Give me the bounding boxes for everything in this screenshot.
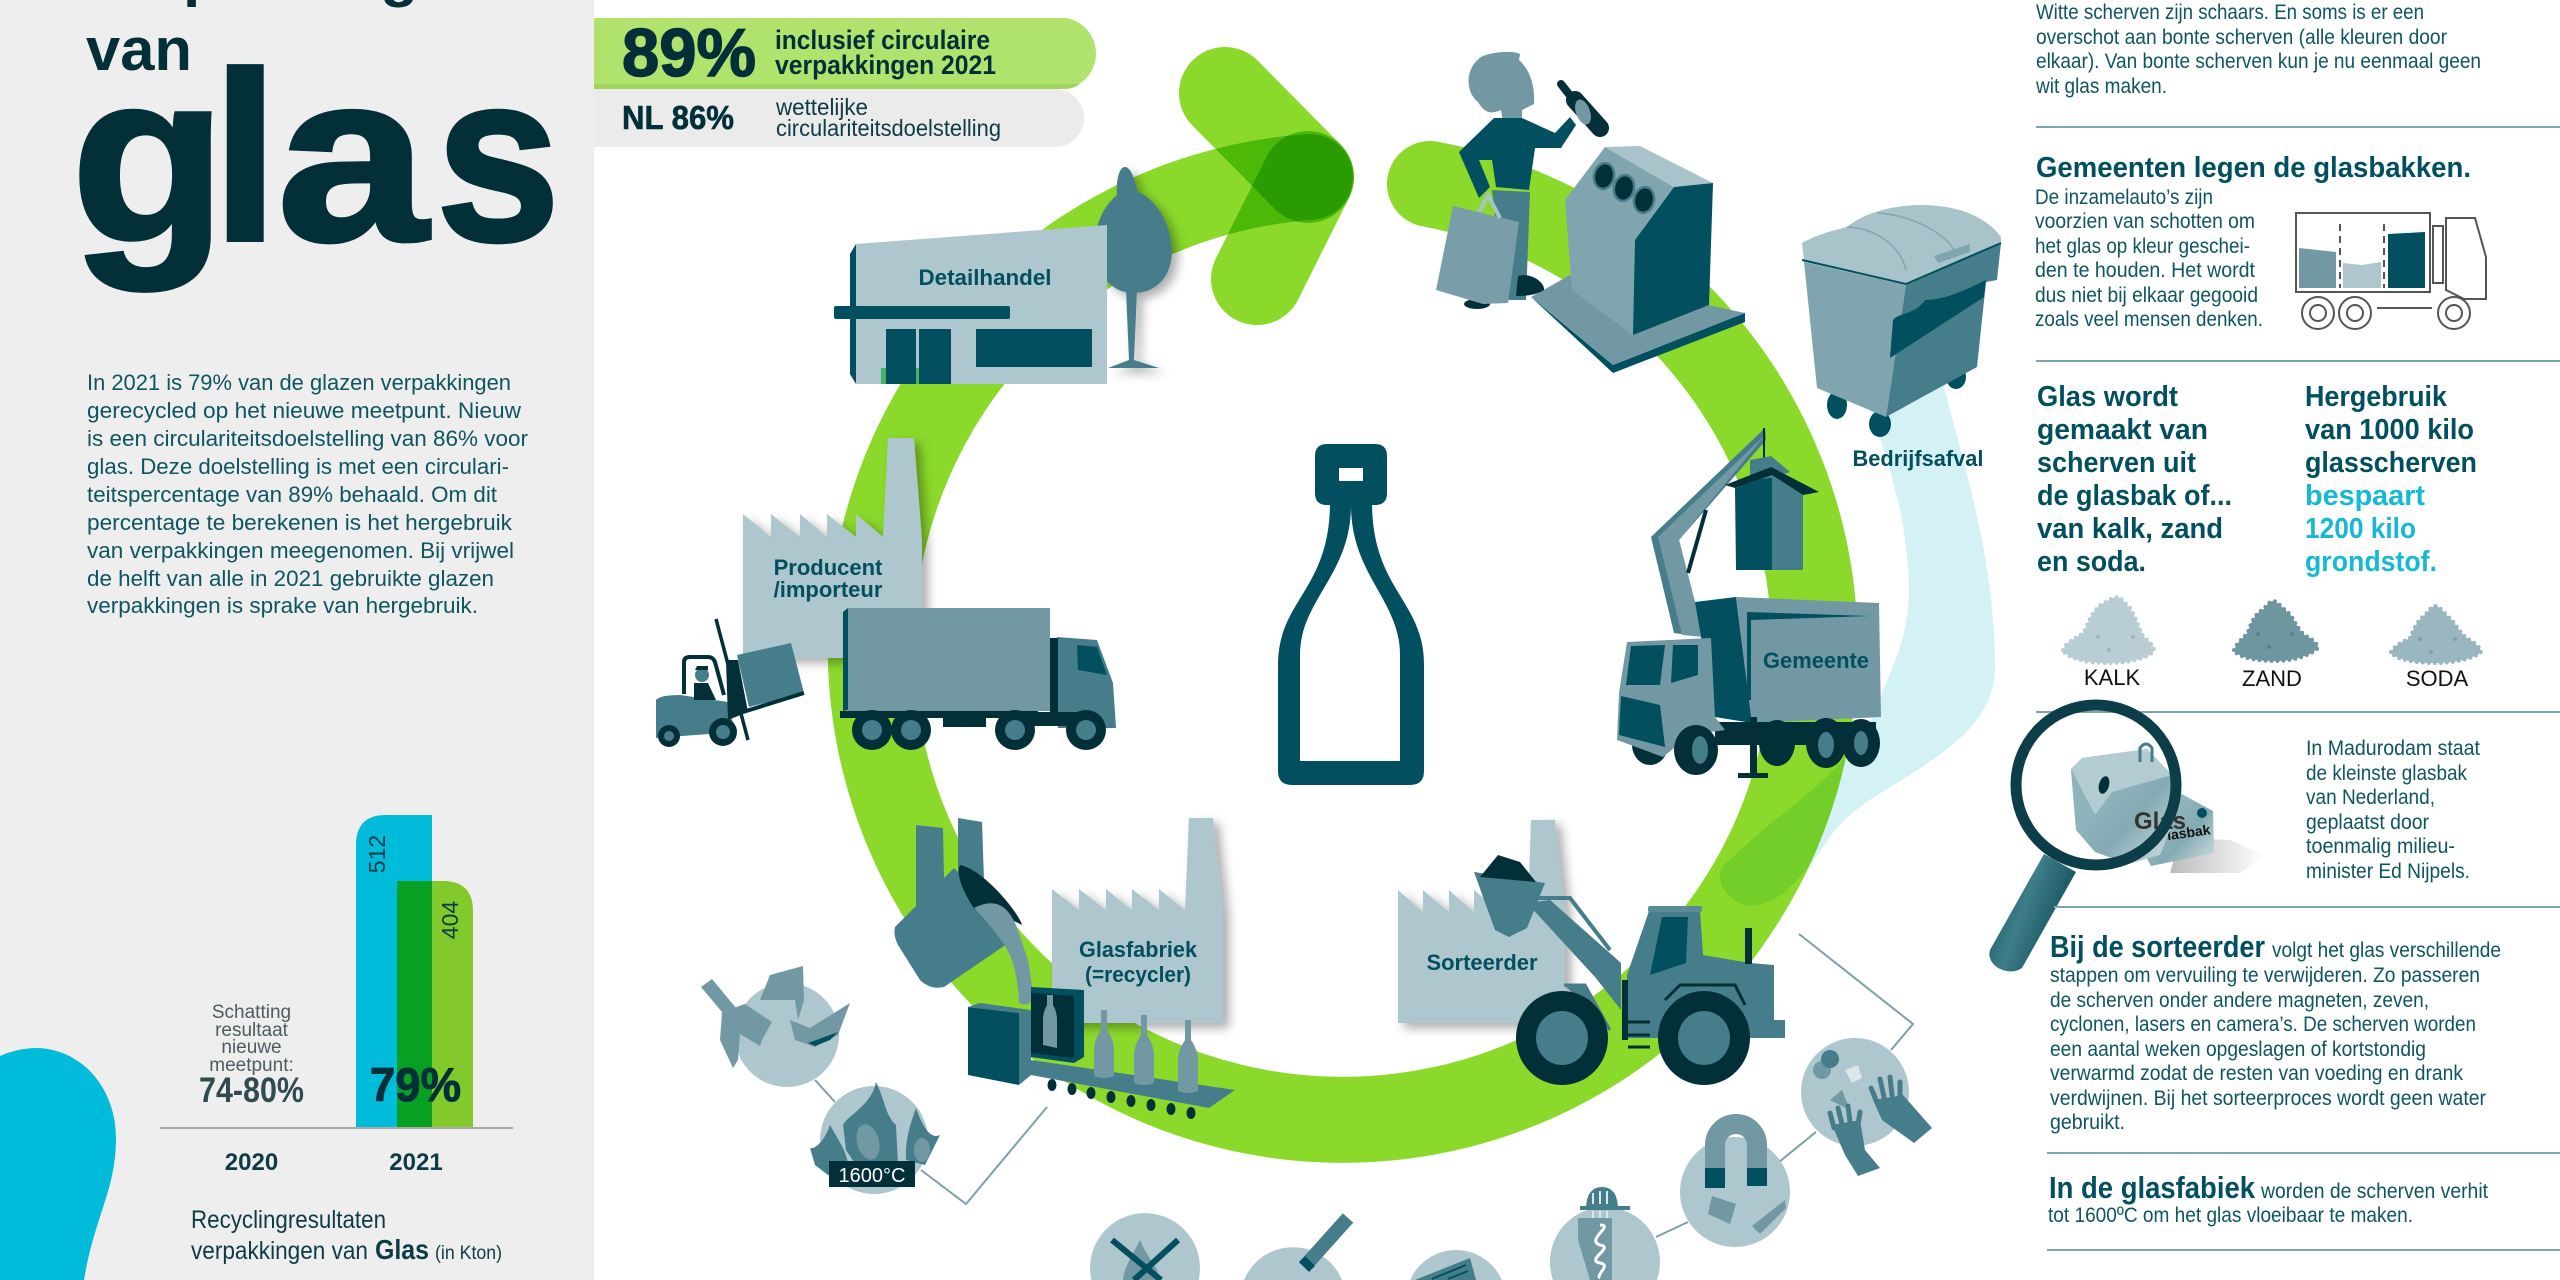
icon: sieve circle bbox=[1410, 1250, 1502, 1280]
text: at the sorter: Bij de sorteerder bbox=[2050, 929, 2265, 964]
icon: raw material piles bbox=[2063, 597, 2481, 691]
text: reuse savings: van 1000 kilo bbox=[2305, 414, 2474, 446]
icon: furnace flames circle bbox=[810, 1082, 940, 1194]
text: cullet shortage: wit glas maken. bbox=[2035, 74, 2167, 98]
icon: hand sorting circle bbox=[1801, 1038, 1932, 1176]
factory bbox=[1052, 818, 1223, 1023]
text: municipal collection: zoals veel mensen denken. bbox=[2035, 307, 2263, 331]
text: how glass is made: gemaakt van bbox=[2037, 414, 2208, 446]
icon: no burning circle bbox=[1090, 1213, 1200, 1280]
station: Sorteerder bbox=[1398, 820, 1785, 1085]
icon: wheel loader bbox=[1474, 855, 1785, 1085]
text: at the sorter: cyclonen, lasers en camera’s. De scherven worden bbox=[2050, 1012, 2476, 1036]
intro text block: van verpakkingen meegenomen. Bij vrijwel bbox=[87, 538, 514, 563]
bar chart: recycling results: 404 bbox=[437, 901, 463, 939]
panel: circular target pills bbox=[594, 15, 1096, 147]
text: at the sorter: gebruikt. bbox=[2050, 1110, 2125, 1134]
text: in the glass factory: worden de scherven verhit bbox=[2260, 1179, 2488, 1203]
intro text block: verpakkingen is sprake van hergebruik. bbox=[87, 593, 478, 618]
intro text block: de helft van alle in 2021 gebruikte glazen bbox=[87, 566, 494, 591]
icon: mould and conveyor with bottles bbox=[968, 987, 1235, 1119]
icon: lorry bbox=[840, 608, 1116, 750]
chart caption: Recyclingresultaten bbox=[191, 1206, 386, 1234]
panel: circular target pills: verpakkingen 2021 bbox=[775, 50, 996, 80]
station: Glasfabriek: Glasfabriek bbox=[1079, 937, 1198, 962]
text: Madurodam bbox=[2306, 736, 2480, 883]
text: reuse savings: bespaart bbox=[2305, 480, 2425, 512]
text: how glass is made: de glasbak of... bbox=[2037, 480, 2232, 512]
decorative blue blob bbox=[0, 1048, 116, 1280]
station: Detailhandel: Detailhandel bbox=[918, 265, 1052, 290]
text: in the glass factory: In de glasfabiek bbox=[2049, 1170, 2256, 1205]
text: at the sorter: volgt het glas verschillende bbox=[2272, 938, 2501, 962]
text: Madurodam: toenmalig milieu- bbox=[2306, 834, 2455, 858]
truck: Gemeente bbox=[1763, 648, 1869, 673]
title bbox=[71, 0, 560, 292]
text: reuse savings: 1200 kilo bbox=[2305, 513, 2416, 545]
text: in the glass factory bbox=[2048, 1170, 2488, 1227]
icon: compartment truck diagram bbox=[2296, 213, 2486, 329]
text: at the sorter: de scherven onder andere magneten, zeven, bbox=[2050, 988, 2429, 1012]
bar chart: recycling results: 2020 bbox=[225, 1149, 278, 1176]
bar chart: recycling results: resultaat bbox=[215, 1020, 289, 1041]
label: Bedrijfsafval: Bedrijfsafval bbox=[1852, 446, 1984, 471]
icon: cyclone circle bbox=[1550, 1187, 1660, 1280]
icon: platform and bottle bank bbox=[1531, 146, 1745, 373]
icon: magnet circle bbox=[1680, 1124, 1790, 1247]
connector lines between process icons bbox=[815, 934, 1913, 1237]
icon: raw material piles: KALK bbox=[2084, 665, 2140, 690]
text: reuse savings: glasscherven bbox=[2305, 447, 2477, 479]
truck bbox=[1617, 597, 1881, 778]
icon: furnace flames circle: 1600°C bbox=[839, 1165, 905, 1187]
text: at the sorter: stappen om vervuiling te verwijderen. Zo passeren bbox=[2050, 963, 2480, 987]
text: reuse savings bbox=[2305, 381, 2477, 578]
bar chart: recycling results: 2021 bbox=[389, 1149, 443, 1176]
chart caption: verpakkingen van bbox=[191, 1237, 368, 1265]
text: municipal collection: Gemeenten legen de glasbakken. bbox=[2036, 152, 2471, 184]
text: Madurodam: de kleinste glasbak bbox=[2306, 761, 2467, 785]
panel: right text column bbox=[1989, 0, 2560, 1251]
text: municipal collection: voorzien van schotten om bbox=[2035, 209, 2255, 233]
text: how glass is made: van kalk, zand bbox=[2037, 513, 2223, 545]
panel: circular target pills: NL 86% bbox=[622, 99, 734, 136]
panel: circular target pills: circulariteitsdoelstelling bbox=[776, 115, 1001, 141]
chart caption: Glas bbox=[375, 1234, 429, 1265]
text: Madurodam: geplaatst door bbox=[2306, 810, 2429, 834]
title: a bbox=[277, 24, 430, 292]
text: municipal collection bbox=[2035, 152, 2471, 331]
icon: pouring ladle bbox=[894, 818, 1034, 1005]
icon: magnifier over Madurodam glass bin: Glasbak bbox=[2155, 821, 2212, 845]
bar chart: recycling results: nieuwe bbox=[221, 1037, 282, 1058]
bar chart: recycling results: meetpunt: bbox=[209, 1055, 294, 1076]
text: municipal collection: De inzamelauto’s zijn bbox=[2035, 185, 2213, 209]
text: how glass is made: scherven uit bbox=[2037, 447, 2196, 479]
title: g bbox=[71, 24, 226, 291]
text: how glass is made: en soda. bbox=[2037, 546, 2146, 578]
text: Madurodam: In Madurodam staat bbox=[2306, 736, 2480, 760]
icon: pipe circle bbox=[1244, 1218, 1348, 1280]
panel: circular target pills: wettelijke bbox=[775, 94, 868, 120]
bar chart: recycling results: 512 bbox=[364, 835, 390, 873]
text: municipal collection: het glas op kleur geschei- bbox=[2035, 234, 2250, 258]
intro text block: percentage te berekenen is het hergebruik bbox=[87, 510, 513, 535]
text: how glass is made: Glas wordt bbox=[2037, 381, 2178, 413]
text: reuse savings: grondstof. bbox=[2305, 546, 2437, 578]
business waste stream bbox=[1720, 383, 1995, 906]
station: Glasfabriek: (=recycler) bbox=[1085, 962, 1191, 987]
text: cullet shortage: Witte scherven zijn schaars. En soms is er een bbox=[2036, 0, 2424, 24]
text: municipal collection: den te houden. Het wordt bbox=[2035, 258, 2255, 282]
title: l bbox=[212, 23, 279, 291]
icon: central bottle bbox=[1278, 444, 1424, 785]
station: Glasfabriek bbox=[894, 818, 1235, 1119]
bar chart: recycling results: Schatting bbox=[212, 1002, 291, 1023]
text: cullet shortage: elkaar). Van bonte scherven kun je nu eenmaal geen bbox=[2036, 49, 2481, 73]
panel: circular target pills: inclusief circulaire bbox=[775, 25, 990, 55]
chart caption: (in Kton) bbox=[435, 1243, 502, 1264]
text: municipal collection: dus niet bij elkaar gegooid bbox=[2035, 283, 2258, 307]
bar chart: recycling results: 79% bbox=[370, 1058, 461, 1111]
icon: magnifier over Madurodam glass bin: Glas bbox=[2134, 808, 2186, 835]
station: Producent / importeur: Producent bbox=[774, 555, 883, 580]
icon: raw material piles: ZAND bbox=[2242, 666, 2302, 691]
station: Detailhandel bbox=[834, 167, 1172, 384]
text: at the sorter: een aantal weken opgeslagen of kortstondig bbox=[2050, 1037, 2426, 1061]
icon: person with bag and bottle bbox=[1436, 52, 1600, 309]
station: Gemeente truck with crane bbox=[1617, 428, 1881, 778]
factory bbox=[1398, 820, 1565, 1023]
text: at the sorter: verwarmd zodat de resten van voeding en drank bbox=[2050, 1061, 2463, 1085]
station: consumer at glass bin bbox=[1436, 52, 1745, 373]
station: Sorteerder: Sorteerder bbox=[1426, 950, 1538, 975]
text: at the sorter bbox=[2050, 929, 2501, 1134]
intro text block: gerecycled op het nieuwe meetpunt. Nieuw bbox=[87, 398, 522, 423]
cycle ring with arrow bbox=[871, 93, 1815, 1120]
text: cullet shortage bbox=[2035, 0, 2481, 98]
title: van bbox=[86, 16, 192, 83]
factory bbox=[743, 438, 922, 658]
icon: raw material piles: SODA bbox=[2406, 666, 2468, 691]
intro text block: glas. Deze doelstelling is met een circulari- bbox=[87, 454, 509, 479]
bar chart: recycling results: 74-80% bbox=[199, 1071, 304, 1110]
intro text block bbox=[87, 370, 528, 618]
text: at the sorter: verdwijnen. Bij het sorteerproces wordt geen water bbox=[2050, 1086, 2486, 1110]
hanging bin and crane bbox=[1651, 428, 1819, 637]
text: in the glass factory: tot 1600ºC om het glas vloeibaar te maken. bbox=[2048, 1203, 2413, 1227]
chart caption bbox=[191, 1206, 502, 1265]
text: Madurodam: minister Ed Nijpels. bbox=[2306, 859, 2470, 883]
icon: magnifier over Madurodam glass bin bbox=[1989, 705, 2265, 972]
icon: forklift bbox=[656, 619, 804, 747]
intro text block: teitspercentage van 89% behaald. Om dit bbox=[87, 482, 498, 507]
station: Producent / importeur: /importeur bbox=[774, 577, 883, 602]
station: Producent / importeur bbox=[656, 438, 1116, 750]
bar chart: recycling results bbox=[160, 815, 513, 1176]
icon: dumpster bbox=[1802, 205, 2001, 437]
title: s bbox=[436, 24, 560, 292]
intro text block: is een circulariteitsdoelstelling van 86% voor bbox=[87, 426, 528, 451]
panel: left intro column bbox=[0, 0, 594, 1280]
shop building bbox=[850, 225, 1107, 384]
text: reuse savings: Hergebruik bbox=[2305, 381, 2448, 413]
panel: circular target pills: 89% bbox=[622, 15, 756, 91]
icon: tree bbox=[1095, 167, 1172, 368]
text: cullet shortage: overschot aan bonte scherven (alle kleuren door bbox=[2036, 25, 2447, 49]
intro text block: In 2021 is 79% van de glazen verpakkingen bbox=[87, 370, 511, 395]
text: Madurodam: van Nederland, bbox=[2306, 785, 2435, 809]
icon: broken glass circle bbox=[701, 966, 850, 1087]
text: how glass is made bbox=[2037, 381, 2232, 578]
